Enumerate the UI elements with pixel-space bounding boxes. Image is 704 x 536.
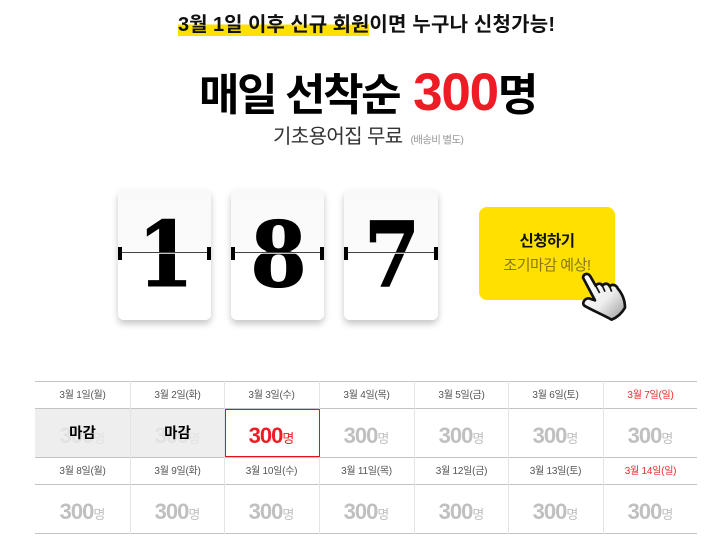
week 2 quotas [60, 499, 673, 524]
week 2 date headers: 3월 12일(금) [436, 466, 487, 477]
closed day background [35, 409, 225, 457]
top notice headline [178, 14, 555, 36]
week 1 date headers: 3월 5일(금) [438, 390, 485, 401]
week 2 date headers [59, 465, 676, 477]
button label: 신청하기 [519, 233, 575, 250]
week 2 date headers: 3월 11일(목) [341, 466, 392, 477]
week 2 date headers: 3월 10일(수) [246, 466, 297, 477]
week 1 date headers: 3월 2일(화) [154, 390, 201, 401]
today highlight box [225, 409, 320, 457]
week 2 quotas: 300명 [155, 499, 200, 524]
week 1 quotas: 300명 [60, 423, 105, 448]
flip card digit 1: 1 [137, 202, 194, 308]
apply button [479, 207, 615, 300]
week 1 quotas: 300명 [439, 423, 484, 448]
week 1 quotas: 300명 [628, 423, 673, 448]
top notice headline: 3월 1일 이후 신규 회원 [178, 14, 369, 36]
week 2 quotas: 300명 [249, 499, 294, 524]
week 2 quotas: 300명 [533, 499, 578, 524]
flip card digit 7 [344, 189, 438, 320]
week 1 quotas: 300명 [249, 423, 294, 448]
week 2 date headers: 3월 9일(화) [154, 466, 201, 477]
week 1 quotas: 300명 [533, 423, 578, 448]
week 1 date headers: 3월 7일(일) [627, 390, 674, 401]
flip card digit 7: 7 [364, 202, 420, 308]
week 2 date headers: 3월 8일(월) [59, 466, 106, 477]
week 2 quotas: 300명 [439, 499, 484, 524]
icon: pointing hand cursor [582, 272, 626, 321]
week 1 date headers: 3월 1일(월) [59, 390, 106, 401]
flip counter [114, 193, 442, 328]
button sublabel: 조기마감 예상! [503, 257, 591, 274]
week 2 quotas: 300명 [60, 499, 105, 524]
week 2 date headers: 3월 13일(토) [530, 466, 581, 477]
subtitle: 기초용어집 무료 (배송비 별도) [273, 126, 463, 148]
week 1 quotas [60, 423, 673, 448]
week 1 quotas: 300명 [155, 423, 200, 448]
closed label 3월 1일: 마감 [69, 426, 96, 442]
flip card digit 8 [231, 189, 324, 320]
flip card digit 1 [118, 189, 211, 320]
week 1 date headers: 3월 3일(수) [248, 390, 295, 401]
week 1 date headers [59, 389, 674, 401]
week 1 date headers: 3월 6일(토) [532, 390, 579, 401]
week 1 date headers: 3월 4일(목) [343, 390, 390, 401]
flip card digit 8: 8 [250, 202, 307, 308]
week 2 quotas: 300명 [344, 499, 389, 524]
schedule calendar table [35, 381, 697, 534]
top notice headline: 이면 누구나 신청가능! [369, 14, 555, 36]
week 2 quotas: 300명 [628, 499, 673, 524]
week 1 quotas: 300명 [344, 423, 389, 448]
main title: 매일 선착순 300명 [199, 63, 536, 122]
closed label 3월 2일: 마감 [164, 426, 191, 442]
week 2 date headers: 3월 14일(일) [625, 466, 676, 477]
